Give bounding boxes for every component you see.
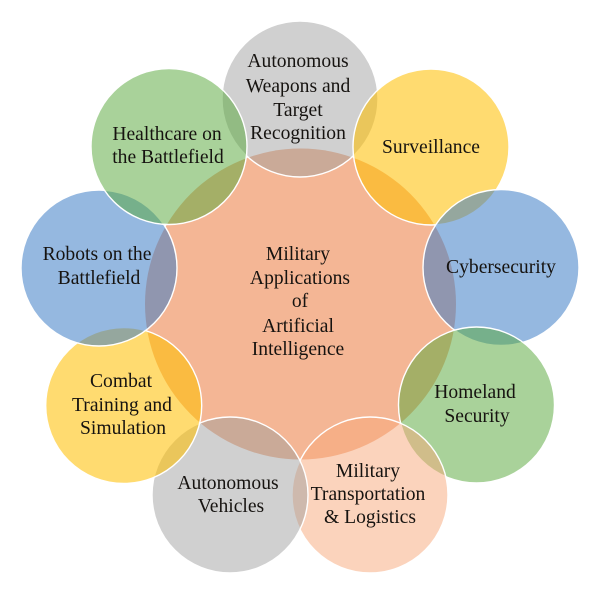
label: homeland security: Homeland — [434, 382, 516, 403]
label: autonomous vehicles: Vehicles — [198, 496, 264, 517]
label: autonomous weapons: Weapons and — [246, 76, 350, 97]
label: cybersecurity: Cybersecurity — [446, 257, 556, 278]
label: autonomous weapons: Target — [273, 100, 323, 121]
label: military transportation: Military — [336, 461, 400, 482]
label: center: Intelligence — [252, 339, 345, 360]
circle: autonomous weapons — [222, 21, 378, 177]
label: center: Military — [266, 244, 330, 265]
circle: cybersecurity — [423, 190, 579, 346]
label: autonomous vehicles: Autonomous — [177, 473, 279, 494]
circle: homeland security — [398, 327, 554, 483]
central circle — [145, 148, 456, 460]
label: healthcare: Healthcare on — [112, 124, 222, 145]
label: robots: Battlefield — [58, 268, 141, 289]
circle: surveillance — [353, 69, 509, 225]
label: military transportation: Transportation — [311, 484, 426, 505]
label: robots: Robots on the — [43, 244, 151, 265]
label: combat training: Combat — [90, 371, 152, 392]
label: center: Artificial — [262, 316, 334, 337]
label: combat training: Training and — [72, 395, 172, 416]
circle: robots — [21, 190, 177, 346]
circle: military transportation — [292, 417, 448, 573]
label: autonomous weapons: Recognition — [250, 123, 346, 144]
label: surveillance: Surveillance — [382, 137, 480, 158]
label: military transportation: & Logistics — [324, 507, 416, 528]
circle: combat training — [46, 328, 202, 484]
label: autonomous weapons: Autonomous — [247, 51, 349, 72]
label: healthcare: the Battlefield — [112, 147, 224, 168]
circle: healthcare — [91, 68, 247, 224]
label: center: of — [292, 291, 309, 312]
label: homeland security: Security — [444, 406, 510, 427]
label: center: Applications — [250, 268, 350, 289]
label: combat training: Simulation — [80, 418, 166, 439]
circle: autonomous vehicles — [152, 417, 308, 573]
